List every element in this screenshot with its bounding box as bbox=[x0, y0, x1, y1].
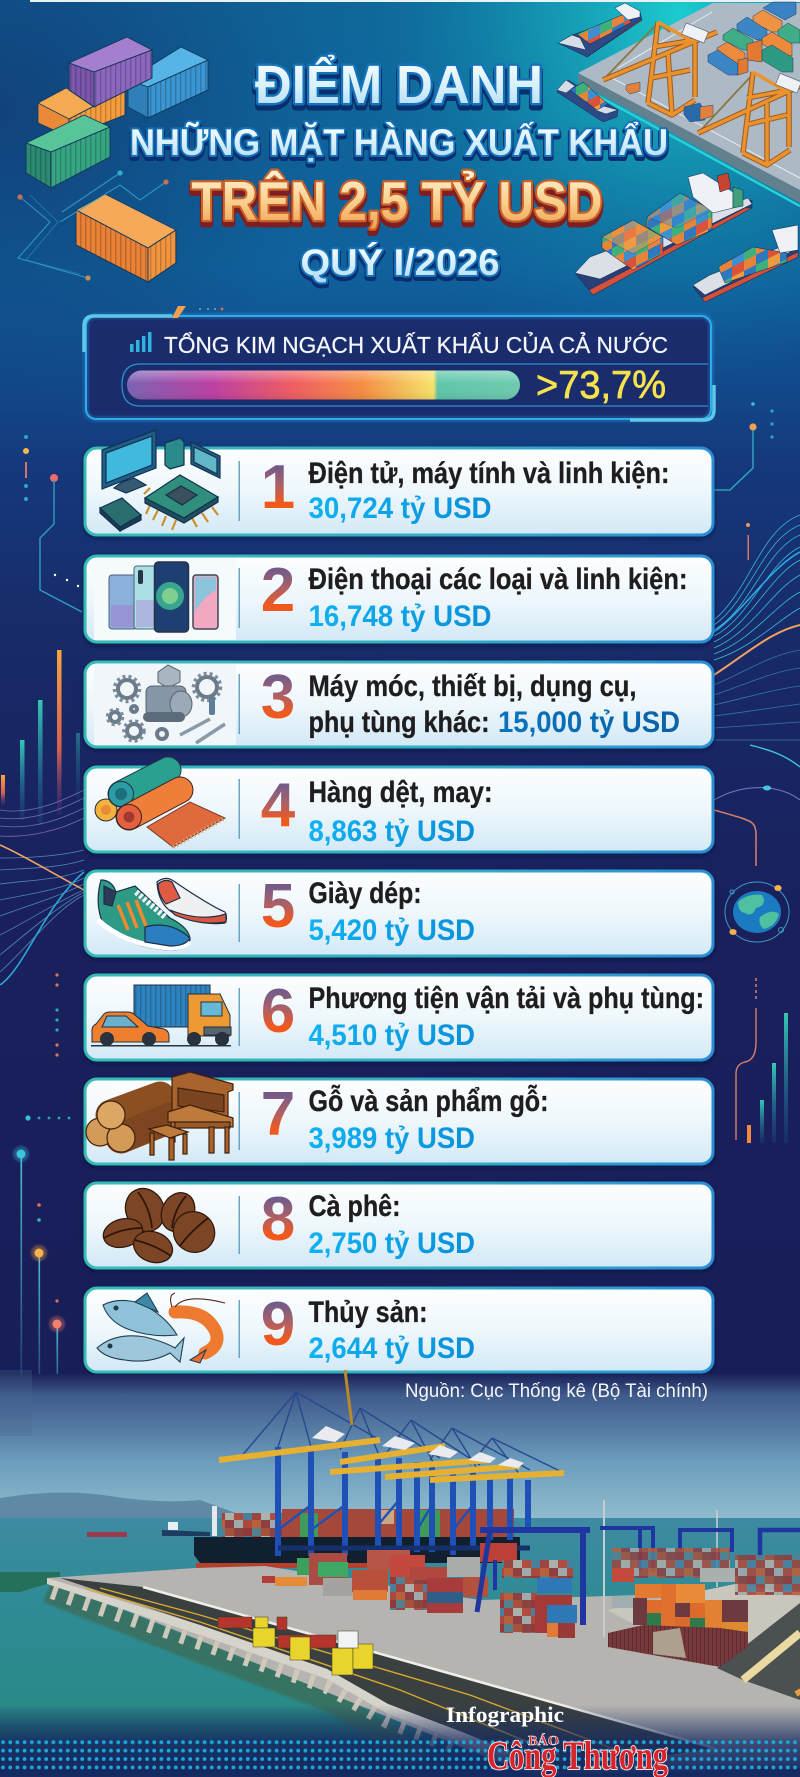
ship 3 bbox=[575, 173, 752, 295]
card 8: coffee bbox=[85, 1182, 713, 1268]
title line 3: TRÊN 2,5 TỶ USD bbox=[192, 174, 602, 236]
container: green bbox=[26, 115, 110, 188]
gantry cranes bbox=[477, 1500, 800, 1637]
yard container stacks bbox=[262, 1543, 577, 1638]
dot pattern bbox=[0, 1738, 800, 1772]
illustration: port quay with cranes bbox=[578, 2, 800, 206]
divider bbox=[238, 779, 240, 839]
divider bbox=[238, 674, 240, 734]
ship 1 bbox=[558, 3, 642, 57]
item name: Cà phê: bbox=[308, 1190, 400, 1223]
rank 4: 4 bbox=[261, 771, 296, 840]
quay cranes bbox=[219, 1370, 564, 1556]
item name: Máy móc, thiết bị, dụng cụ, bbox=[308, 670, 636, 703]
icon: truck and car bbox=[91, 985, 231, 1046]
title line 2: NHỮNG MẶT HÀNG XUẤT KHẨU bbox=[130, 121, 668, 163]
item value: 3,989 tỷ USD bbox=[308, 1122, 475, 1155]
circuit lines bbox=[17, 170, 169, 281]
rank 2: 2 bbox=[261, 556, 295, 625]
icon: fish and shrimp bbox=[97, 1293, 225, 1363]
container: large orange bbox=[76, 194, 176, 282]
container: orange small bbox=[38, 88, 125, 137]
divider bbox=[238, 1092, 240, 1150]
item value: 16,748 tỷ USD bbox=[308, 600, 492, 633]
pier edge bbox=[47, 1578, 560, 1772]
rank 6: 6 bbox=[261, 977, 295, 1046]
water reflection beside pier bbox=[47, 1592, 420, 1760]
item value: 15,000 tỷ USD bbox=[498, 706, 680, 739]
pier dark lane bbox=[60, 1578, 714, 1772]
item name: Gỗ và sản phẩm gỗ: bbox=[308, 1084, 548, 1118]
illustration: container ships bbox=[557, 3, 798, 302]
ship 4 bbox=[693, 225, 798, 302]
logo: Báo Công Thương: BÁO bbox=[528, 1732, 559, 1749]
item name: Hàng dệt, may: bbox=[308, 776, 492, 809]
card 4: textiles bbox=[85, 767, 713, 852]
item name: Phương tiện vận tải và phụ tùng: bbox=[308, 982, 704, 1015]
icon: coffee beans bbox=[100, 1182, 223, 1268]
right side decoration bbox=[714, 402, 800, 1143]
item value: 30,724 tỷ USD bbox=[308, 492, 492, 525]
container ship bbox=[194, 1506, 520, 1568]
yard far pavement and lanes bbox=[607, 1583, 800, 1700]
item value: 4,510 tỷ USD bbox=[308, 1019, 475, 1052]
crane 2 bbox=[698, 72, 800, 165]
item name: Điện tử, máy tính và linh kiện: bbox=[308, 457, 670, 490]
logo: Báo Công Thương bbox=[446, 1702, 668, 1777]
rank 8: 8 bbox=[261, 1185, 295, 1254]
divider bbox=[238, 884, 240, 942]
icon: sneakers bbox=[98, 878, 226, 950]
container: purple bbox=[69, 37, 152, 107]
item value: 2,644 tỷ USD bbox=[308, 1332, 475, 1365]
panel heading: TỔNG KIM NGẠCH XUẤT KHẨU CỦA CẢ NƯỚC bbox=[164, 330, 668, 358]
card 1: electronics bbox=[85, 430, 713, 535]
item value: 2,750 tỷ USD bbox=[308, 1227, 475, 1260]
item value: 5,420 tỷ USD bbox=[308, 914, 475, 947]
rank 5: 5 bbox=[261, 872, 295, 941]
trucks bbox=[218, 1617, 373, 1675]
quay yard bbox=[47, 1566, 800, 1775]
icon: machinery and gears bbox=[94, 664, 236, 745]
logo: Báo Công Thương: Infographic bbox=[446, 1702, 564, 1727]
value: percentage: >73,7% bbox=[536, 364, 666, 407]
illustration: floating containers bbox=[26, 37, 208, 282]
title bbox=[130, 55, 668, 286]
far container stacks bbox=[612, 1548, 800, 1608]
crane 1 bbox=[603, 22, 717, 115]
item name: Giày dép: bbox=[308, 877, 422, 910]
icon: computer and chip bbox=[100, 430, 220, 531]
container: blue bbox=[128, 47, 208, 118]
card 5: footwear bbox=[85, 871, 713, 956]
icon: globe bbox=[725, 882, 789, 942]
divider bbox=[238, 461, 240, 521]
rank 1: 1 bbox=[261, 453, 295, 522]
card 7: wood bbox=[85, 1072, 713, 1164]
ships at anchor bbox=[87, 1522, 210, 1537]
divider bbox=[238, 1300, 240, 1358]
card 3: machinery bbox=[85, 662, 713, 747]
pier pillars bbox=[52, 1592, 462, 1750]
icon: smartphones bbox=[94, 558, 236, 640]
divider bbox=[238, 1196, 240, 1254]
rank 7: 7 bbox=[261, 1080, 295, 1149]
card 6: vehicles bbox=[85, 975, 713, 1060]
ship 2 bbox=[557, 80, 618, 122]
card 9: seafood bbox=[85, 1288, 713, 1372]
title line 3: TRÊN 2,5 TỶ USD bbox=[192, 170, 602, 232]
logo: Báo Công Thương: Công Thương bbox=[487, 1733, 668, 1777]
container stacks on quay bbox=[708, 2, 800, 75]
item name: Điện thoại các loại và linh kiện: bbox=[308, 563, 688, 596]
photo: container port bbox=[0, 1370, 800, 1777]
icon: logs and furniture bbox=[86, 1072, 233, 1160]
divider bbox=[238, 988, 240, 1046]
item name: Thủy sản: bbox=[308, 1296, 428, 1329]
icon: signal bars bbox=[130, 332, 152, 352]
title line 1: ĐIỂM DANH bbox=[255, 59, 543, 119]
item name and value: phụ tùng khác: bbox=[308, 706, 490, 739]
title line 2: NHỮNG MẶT HÀNG XUẤT KHẨU bbox=[130, 124, 668, 166]
title line 1: ĐIỂM DANH bbox=[255, 55, 543, 115]
title line 4: QUÝ I/2026 bbox=[300, 242, 500, 283]
rank 3: 3 bbox=[261, 663, 295, 732]
rank 9: 9 bbox=[261, 1290, 295, 1359]
card 2: phones bbox=[85, 556, 713, 642]
left side decoration bbox=[0, 435, 84, 1404]
title line 4: QUÝ I/2026 bbox=[300, 245, 500, 286]
panel: total export turnover bbox=[84, 306, 714, 420]
item value: 8,863 tỷ USD bbox=[308, 815, 475, 848]
progress bar bbox=[122, 364, 708, 406]
source note: Nguồn: Cục Thống kê (Bộ Tài chính) bbox=[405, 1381, 708, 1402]
footer band bbox=[0, 1705, 800, 1777]
icon: fabric rolls bbox=[95, 770, 225, 847]
divider bbox=[238, 568, 240, 628]
orange container stack bbox=[608, 1584, 748, 1667]
